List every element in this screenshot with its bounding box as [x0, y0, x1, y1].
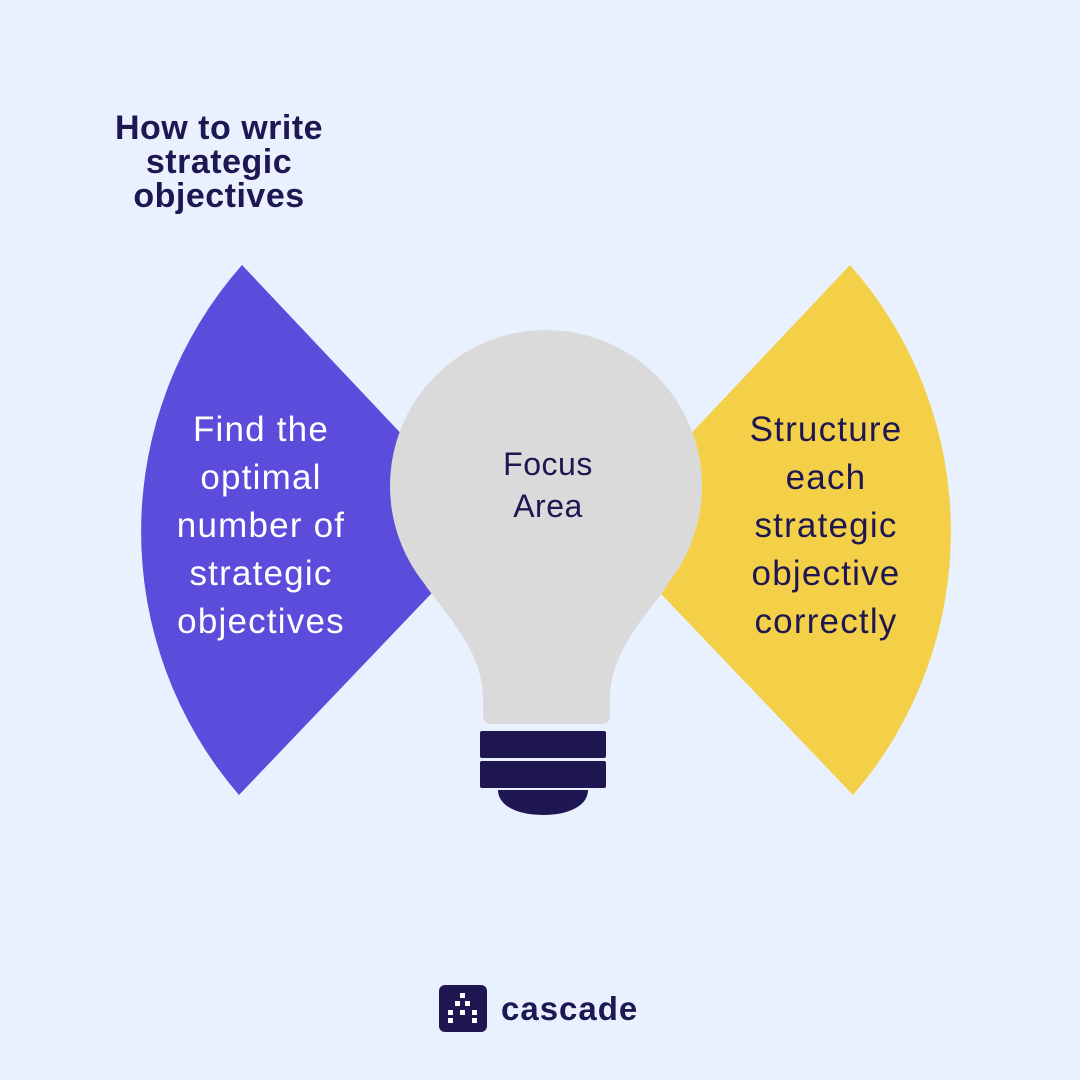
text: find the optimal number: strategic [189, 554, 333, 593]
title: objectives [133, 177, 305, 215]
text: find the optimal number [177, 410, 345, 641]
title: How to write [115, 109, 323, 147]
text: find the optimal number: number of [177, 506, 345, 545]
logo: cascade [439, 985, 638, 1032]
text: structure each objective: objective [752, 554, 900, 593]
text: structure each objective: correctly [754, 602, 898, 641]
text: focus area: Focus [503, 446, 593, 482]
text: structure each objective: strategic [754, 506, 898, 545]
text: structure each objective: Structure [750, 410, 902, 449]
text: find the optimal number: objectives [177, 602, 345, 641]
title [115, 109, 323, 215]
title: strategic [146, 143, 292, 181]
text: focus area [503, 446, 593, 524]
text: structure each objective: each [786, 458, 866, 497]
icon: light bulb [390, 330, 702, 815]
panel: purple wedge [141, 265, 492, 795]
logo: cascade: cascade [501, 990, 638, 1027]
text: focus area: Area [513, 488, 583, 524]
text: find the optimal number: Find the [193, 410, 329, 449]
panel: yellow wedge [600, 265, 951, 795]
text: structure each objective [750, 410, 902, 641]
text: find the optimal number: optimal [200, 458, 322, 497]
